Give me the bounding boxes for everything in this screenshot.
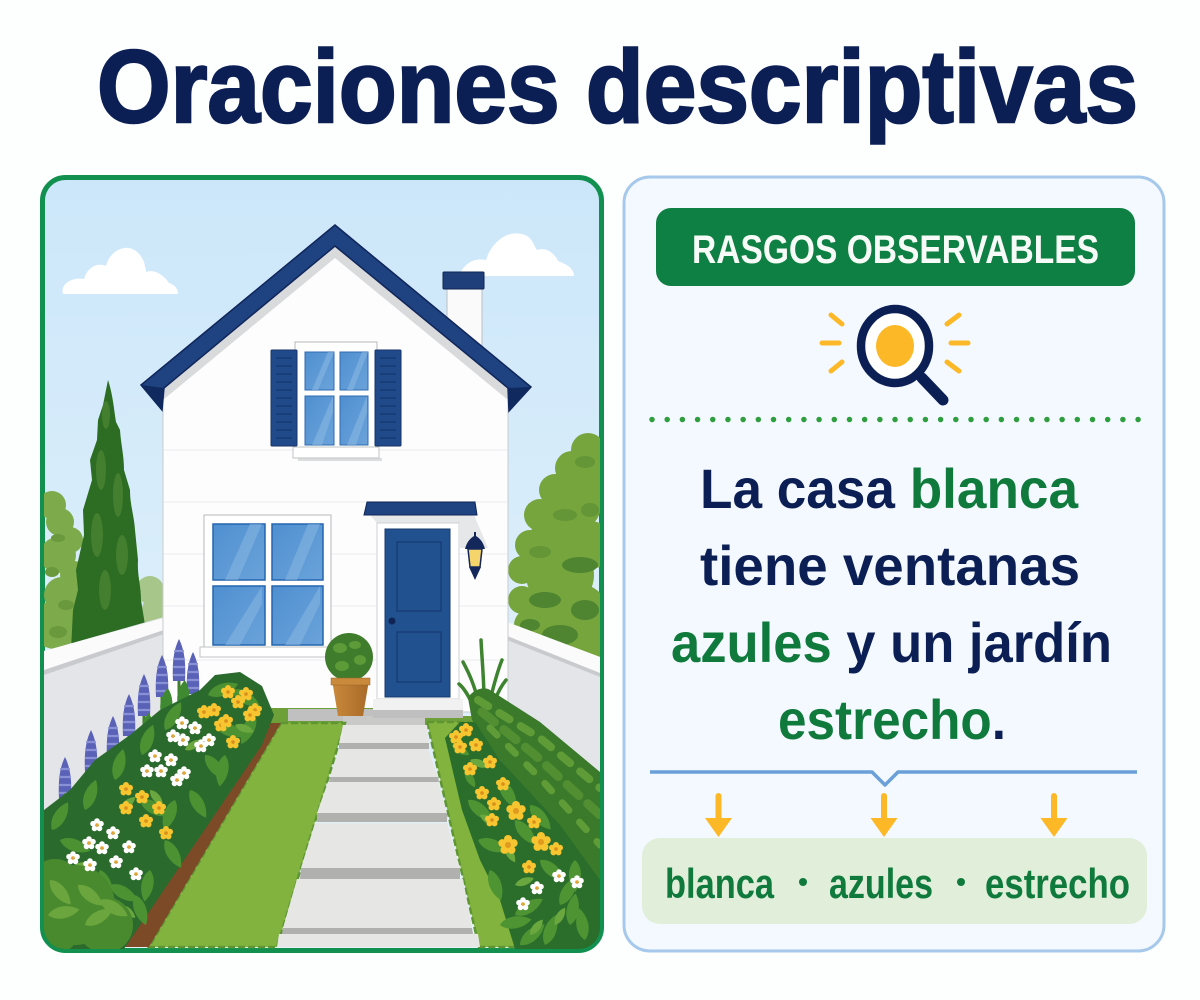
step <box>373 699 463 718</box>
left flower bed <box>29 639 274 954</box>
white flowers <box>516 869 584 910</box>
awning <box>364 502 477 515</box>
hedge and spiky plant <box>459 640 600 885</box>
potted plant <box>325 633 373 716</box>
panel: observable traits <box>624 177 1164 951</box>
chimney <box>443 272 484 348</box>
banner heading: RASGOS OBSERVABLES <box>692 228 1099 272</box>
banner heading <box>656 208 1135 286</box>
descriptive sentence: estrecho. <box>778 688 1006 751</box>
keyword chip <box>642 838 1147 924</box>
icon: right cloud <box>458 233 574 276</box>
lower window <box>200 515 331 657</box>
white flowers <box>66 716 216 880</box>
descriptive sentence: tiene ventanas <box>700 534 1080 597</box>
right lawn <box>426 721 515 948</box>
upper window <box>293 342 382 461</box>
panel: house illustration <box>29 178 614 954</box>
icon: magnifying glass <box>822 309 968 400</box>
house <box>141 225 531 712</box>
left fence <box>44 618 162 810</box>
ground strip <box>270 708 474 725</box>
descriptive sentence: La casa blanca <box>700 457 1079 520</box>
icon: wall lamp <box>465 532 485 580</box>
wall <box>163 246 508 712</box>
cypress tree <box>71 380 145 650</box>
background foliage left <box>44 491 162 649</box>
arrow: to azules <box>870 793 898 837</box>
door <box>377 523 459 699</box>
yellow flowers <box>119 685 262 839</box>
awning shadow <box>370 515 488 548</box>
title: Oraciones descriptivas <box>97 29 1138 144</box>
left shutter <box>271 350 297 446</box>
arrow: to blanca <box>705 793 732 837</box>
icon: left cloud <box>63 248 178 294</box>
yellow flowers <box>449 723 563 873</box>
arrow: to estrecho <box>1040 793 1068 837</box>
right flower bed <box>445 722 600 950</box>
stone path <box>277 725 480 947</box>
keyword chip: estrecho <box>985 860 1130 907</box>
descriptive sentence: azules y un jardín <box>671 611 1112 674</box>
keyword chip: azules <box>829 860 933 907</box>
roof <box>141 225 531 411</box>
lower left bush <box>44 859 133 949</box>
right shutter <box>375 350 401 446</box>
lupins <box>58 639 200 798</box>
right tree <box>508 433 600 657</box>
right fence <box>508 622 600 772</box>
bracket line <box>650 772 1137 785</box>
keyword chip: blanca <box>665 860 775 907</box>
descriptive sentence <box>671 457 1112 751</box>
left lawn <box>149 723 345 947</box>
mulch strip <box>124 723 281 947</box>
